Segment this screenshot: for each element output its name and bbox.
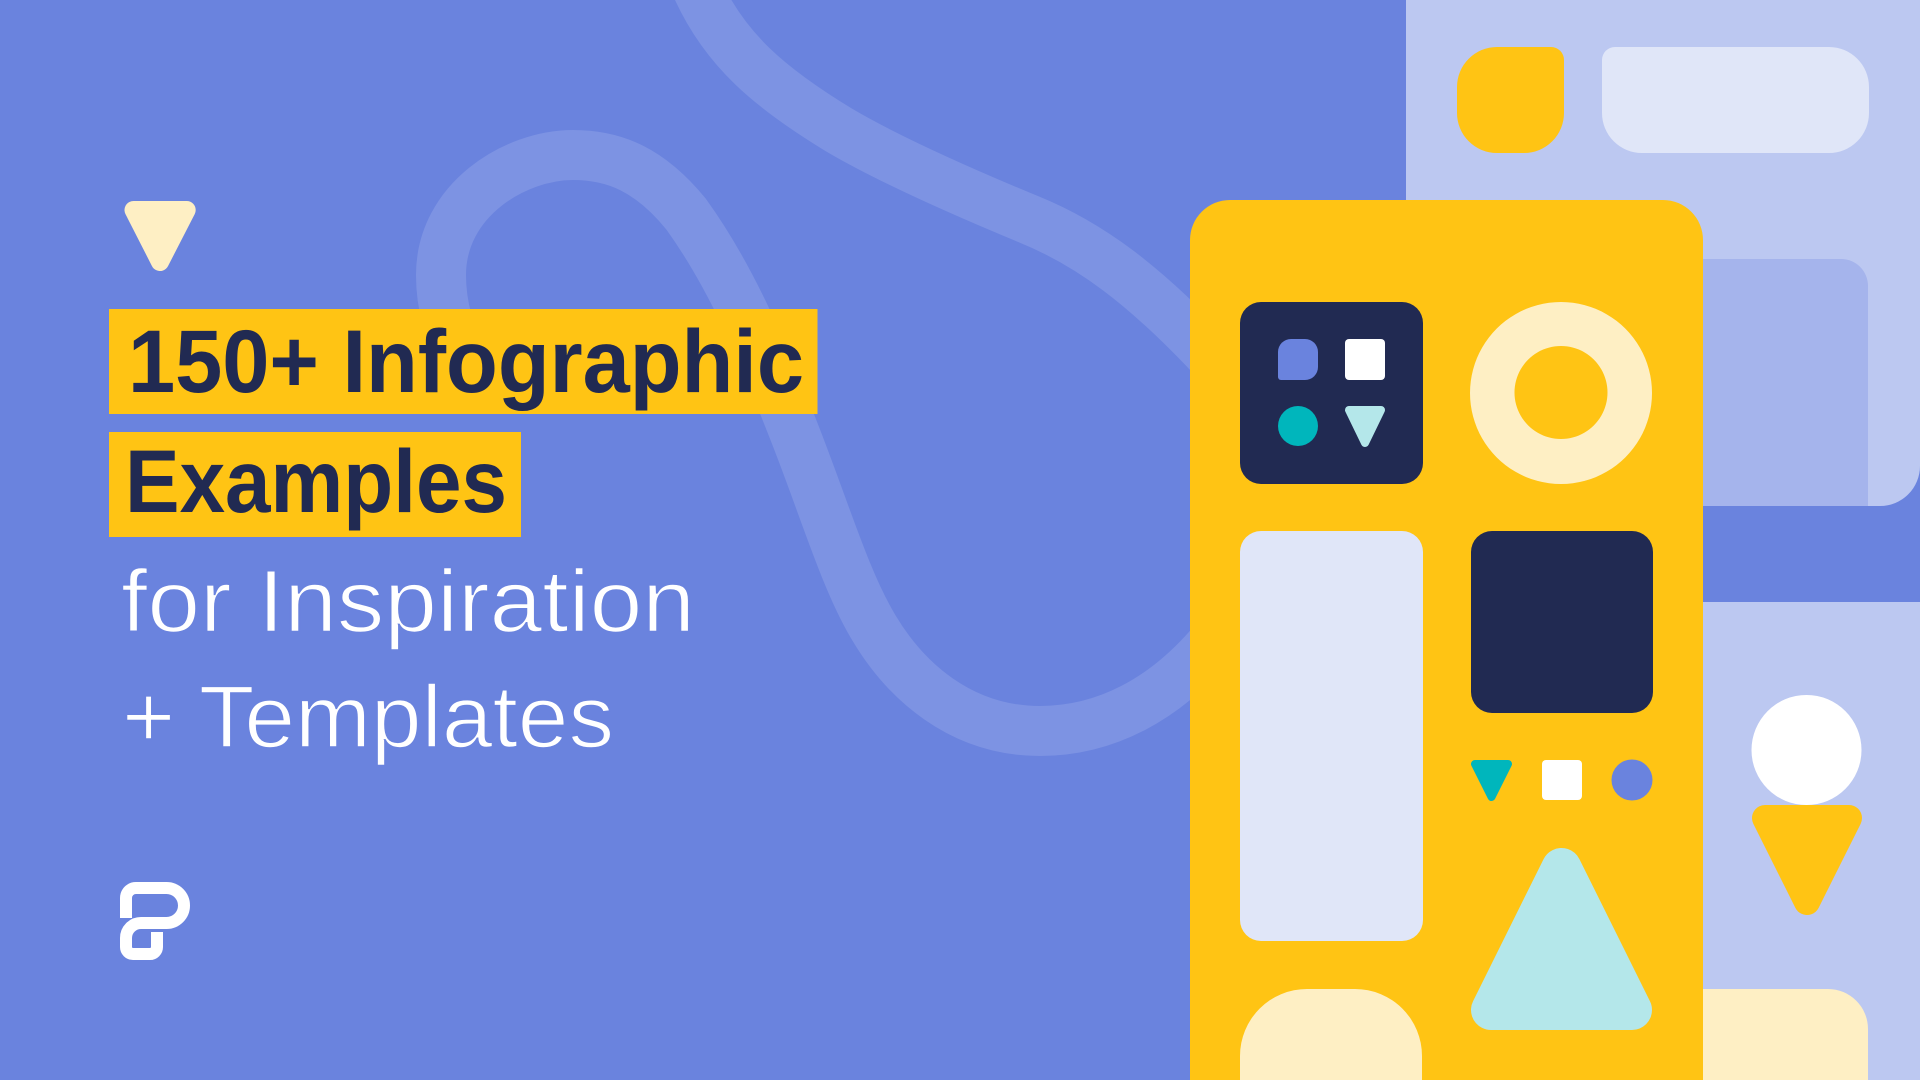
dark icon card [1240,302,1423,484]
cream arch card [1240,989,1422,1080]
title highlight line 2: Examples [125,431,507,531]
decorative ribbon curve [441,0,1215,731]
icon: blue rounded square [1278,339,1318,380]
dark square card [1471,531,1653,713]
yellow triangle [1765,818,1849,902]
subtitle line 2: + Templates [122,667,614,766]
yellow rounded square [1457,47,1564,153]
icon: white square [1345,339,1385,380]
subtitle line 1: for Inspiration [121,552,695,650]
cream card [1690,989,1868,1080]
icon: teal circle [1278,406,1318,446]
icon: aqua triangle [1349,410,1381,443]
panel: main yellow card [1190,200,1703,1080]
panel: lower right light background [1406,602,1920,1080]
inner periwinkle card [1690,259,1868,506]
icon: teal triangle [1475,764,1508,797]
icon: cream triangle [134,210,187,262]
icon: white square small [1542,760,1582,800]
pale tall card [1240,531,1423,941]
aqua large triangle [1491,868,1632,1010]
icon: blue circle [1612,760,1652,800]
pale rounded bar [1602,47,1869,153]
cream ring [1470,302,1652,484]
title highlight line 1: 150+ Infographic [128,311,804,411]
white circle [1752,695,1862,805]
logo [126,888,184,954]
panel: upper right light background [1406,0,1920,506]
